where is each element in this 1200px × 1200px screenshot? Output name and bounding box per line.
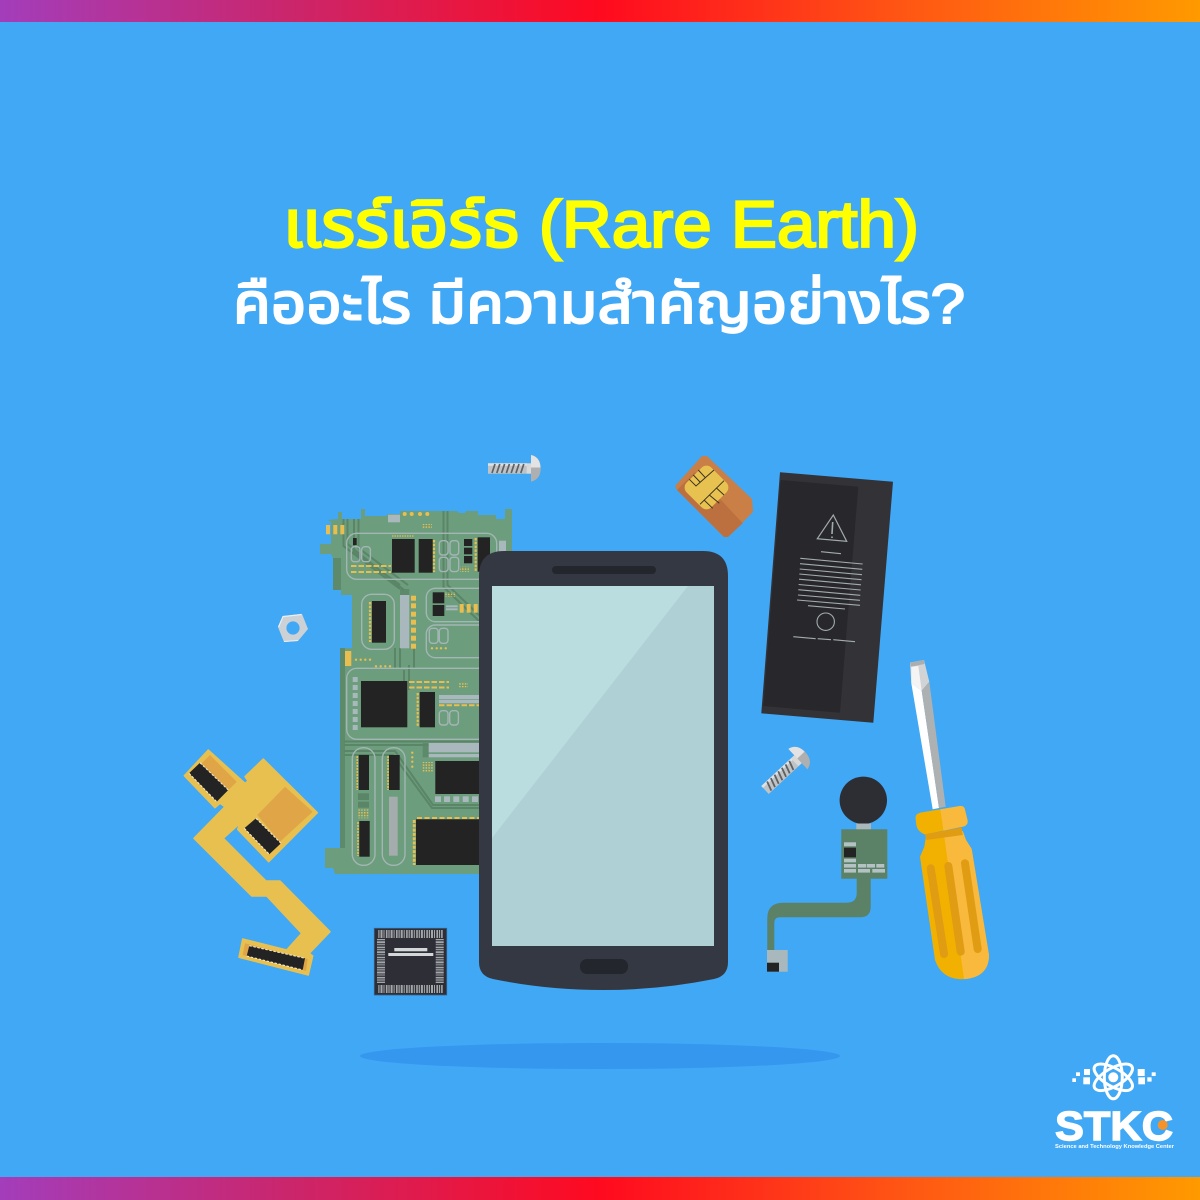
icon: microchip	[374, 928, 447, 995]
heading line 1: แรร์เอิร์ธ (Rare Earth)	[283, 187, 919, 261]
title	[233, 187, 965, 335]
flex cable orange pads	[202, 755, 313, 971]
connector tip	[767, 963, 779, 972]
icon: screw top	[488, 455, 541, 482]
circuit board	[320, 509, 512, 874]
icon: screwdriver	[910, 660, 989, 979]
board outline	[320, 509, 512, 874]
top gradient bar	[0, 0, 1200, 22]
round speaker	[840, 777, 887, 824]
logo tagline: Science and Technology Knowledge Center	[1055, 1144, 1175, 1150]
battery warning triangle	[817, 515, 847, 541]
screwdriver tip	[910, 660, 929, 691]
icon: hex nut	[278, 614, 308, 642]
phone body	[479, 551, 728, 990]
module cable	[767, 878, 871, 950]
phone	[479, 551, 728, 990]
icon: screw right	[755, 742, 815, 800]
battery label text lines	[793, 552, 863, 642]
logo	[1055, 1056, 1175, 1150]
black chips	[353, 537, 490, 865]
screwdriver handle	[920, 831, 989, 979]
flex cable connectors	[189, 763, 305, 970]
gray components	[353, 515, 506, 856]
logo orange dot	[1158, 1120, 1168, 1130]
phone screen	[492, 586, 714, 946]
logo wordmark: STKC	[1055, 1103, 1173, 1149]
gold pins	[351, 536, 486, 865]
circuit outlines	[347, 533, 497, 865]
screwdriver shaft	[911, 683, 939, 809]
icon: SIM card	[675, 456, 753, 537]
board traces	[344, 511, 480, 808]
phone home button	[580, 959, 628, 974]
bottom gradient bar	[0, 1177, 1200, 1200]
connector contacts	[189, 763, 305, 970]
module board	[841, 829, 887, 879]
board shaded edges	[333, 558, 429, 848]
earpiece module	[767, 777, 887, 972]
module board parts	[844, 842, 885, 873]
speaker neck	[856, 824, 871, 830]
flex cable body	[184, 750, 330, 975]
logo atom icon	[1090, 1056, 1136, 1099]
gold pads	[326, 512, 478, 818]
module connector	[767, 950, 788, 972]
icon: battery	[761, 472, 893, 723]
handle grooves	[931, 863, 978, 954]
module chip	[844, 848, 856, 857]
heading line 2: คืออะไร มีความสำคัญอย่างไร?	[233, 272, 965, 335]
logo pixel squares	[1072, 1069, 1156, 1084]
handle collar	[916, 806, 968, 834]
green pads	[358, 793, 369, 808]
phone speaker	[552, 566, 656, 574]
handle collar band	[925, 828, 963, 840]
ground shadow	[360, 1043, 840, 1069]
screen reflection	[492, 586, 688, 838]
flex cable	[184, 750, 330, 975]
